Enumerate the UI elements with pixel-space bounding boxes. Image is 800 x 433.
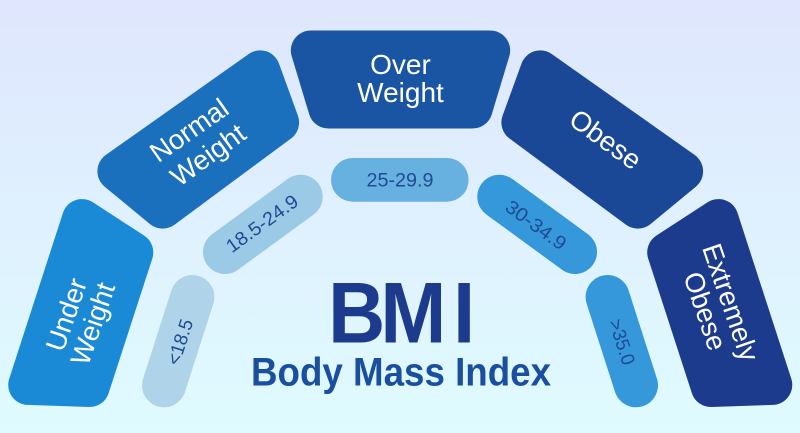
- pill: under 18.5: <18.5: [164, 317, 198, 368]
- panel: over weight: [291, 30, 510, 129]
- pill: 25-29.9: [331, 158, 469, 202]
- title: BMI: BMI: [328, 264, 475, 361]
- panel: obese: Obese: [564, 103, 647, 176]
- pill: over 35.0: >35.0: [604, 317, 638, 368]
- panel: over weight: Over: [370, 49, 431, 80]
- panel: normal weight: Weight: [164, 117, 252, 192]
- subtitle: Body Mass Index: Body Mass Index: [251, 351, 551, 395]
- panel: extremely obese: Extremely: [696, 239, 765, 365]
- panel: under weight: Under: [39, 274, 93, 355]
- pill: 30-34.9: 30-34.9: [501, 197, 570, 255]
- panel: normal weight: Normal: [144, 92, 234, 168]
- pill: under 18.5: [164, 297, 198, 385]
- panel: normal weight: [97, 50, 299, 229]
- panel: under weight: Weight: [64, 278, 121, 369]
- panel: obese: [501, 50, 703, 229]
- pill: 18.5-24.9: 18.5-24.9: [222, 191, 303, 257]
- pill: 25-29.9: 25-29.9: [366, 170, 434, 192]
- panel: extremely obese: [647, 199, 792, 407]
- panel: under weight: [8, 199, 153, 407]
- panel: over weight: Weight: [357, 77, 444, 108]
- panel: extremely obese: Obese: [677, 268, 733, 354]
- pill: over 35.0: [604, 297, 638, 385]
